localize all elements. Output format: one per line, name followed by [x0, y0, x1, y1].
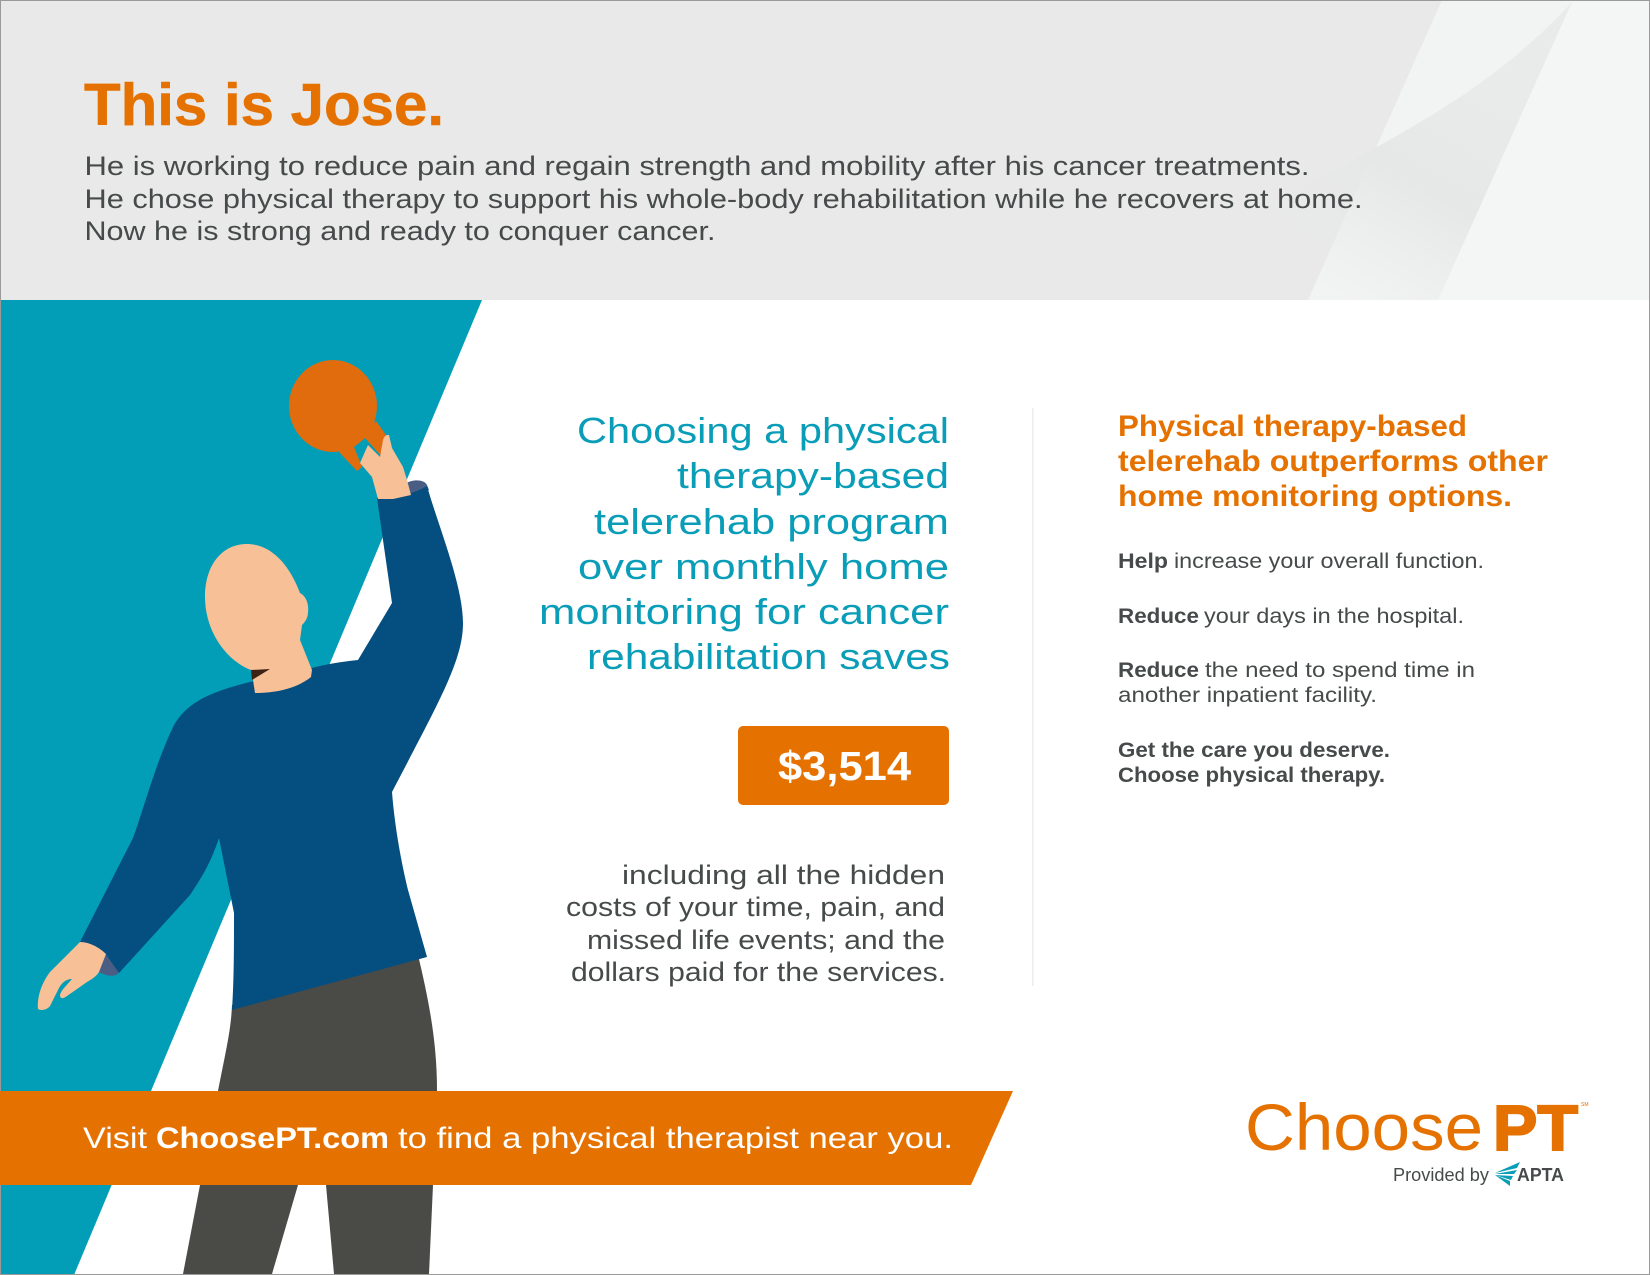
callout: savings amount — [738, 726, 949, 805]
benefit: hospital days: Reduce — [1118, 605, 1199, 628]
text block: teal savings statement: rehabilitation saves — [587, 636, 950, 677]
callout: savings amount: $3,514 — [778, 743, 911, 789]
lowered hand — [38, 942, 106, 1010]
benefit: hospital days — [1118, 605, 1464, 628]
benefit: function: increase your overall function. — [1174, 550, 1484, 573]
banner: visit ChoosePT.com: ChoosePT.com — [156, 1122, 389, 1155]
text block: hidden costs: dollars paid for the services. — [571, 957, 946, 987]
pants — [183, 955, 437, 1274]
text block: teal savings statement: monitoring for cancer — [539, 591, 949, 632]
text block: teal savings statement: telerehab program — [594, 501, 949, 542]
text block: intro — [84, 151, 1362, 246]
benefit: inpatient time — [1118, 659, 1475, 707]
text block: hidden costs: including all the hidden — [622, 860, 945, 890]
heading — [1118, 410, 1549, 513]
shirt — [80, 486, 463, 1010]
text block: intro: He is working to reduce pain and regain strength and mobility after his cancer treatments. — [84, 151, 1310, 181]
text block: hidden costs: missed life events; and the — [587, 925, 945, 955]
icon: APTA mark — [1495, 1162, 1520, 1186]
benefit: hospital days: your days in the hospital. — [1204, 605, 1464, 628]
closing call to action: Choose physical therapy. — [1118, 764, 1385, 787]
sleeve cuff, left arm — [99, 953, 119, 976]
benefit: inpatient time: Reduce — [1118, 659, 1199, 682]
closing call to action — [1118, 739, 1390, 787]
benefit: inpatient time: the need to spend time in — [1205, 659, 1475, 682]
neck shadow — [251, 669, 270, 680]
logo: ChoosePT: Choose — [1245, 1090, 1483, 1164]
logo: ChoosePT: Provided by — [1393, 1165, 1489, 1185]
illustration: Jose reaching up with a ball — [38, 360, 463, 1274]
text block: intro: Now he is strong and ready to conquer cancer. — [84, 216, 716, 246]
sleeve cuff, right arm — [405, 480, 429, 498]
banner: visit ChoosePT.com — [0, 1091, 1013, 1185]
heading: Physical therapy-based — [1118, 410, 1467, 443]
text block: teal savings statement — [539, 410, 950, 677]
heading: home monitoring options. — [1118, 480, 1512, 513]
logo: ChoosePT: PT — [1493, 1092, 1578, 1164]
raised hand — [360, 435, 411, 499]
benefit: inpatient time: another inpatient facility. — [1118, 684, 1377, 707]
text block: teal savings statement: Choosing a physical — [577, 410, 949, 451]
closing call to action: Get the care you deserve. — [1118, 739, 1390, 762]
text block: teal savings statement: over monthly home — [578, 546, 949, 587]
text block: intro: He chose physical therapy to support his whole-body rehabilitation while he recovers at home. — [84, 184, 1362, 214]
panel: teal slanted background — [0, 300, 482, 1275]
logo: ChoosePT: APTA — [1517, 1165, 1564, 1185]
heading: telerehab outperforms other — [1118, 445, 1549, 478]
panel: header band — [0, 0, 1650, 300]
text block: hidden costs: costs of your time, pain, and — [566, 892, 945, 922]
banner: visit ChoosePT.com: Visit — [83, 1122, 148, 1155]
panel: telerehab benefits — [1118, 410, 1549, 787]
text block: hidden costs — [566, 860, 946, 987]
title: This is Jose. — [84, 72, 444, 138]
logo: ChoosePT: SM — [1581, 1102, 1588, 1108]
text block: teal savings statement: therapy-based — [677, 455, 949, 496]
banner: visit ChoosePT.com: to find a physical therapist near you. — [398, 1122, 953, 1155]
ball with handle — [289, 360, 386, 471]
head and neck — [205, 544, 312, 693]
logo: ChoosePT — [1245, 1090, 1588, 1186]
benefit: function: Help — [1118, 550, 1168, 573]
